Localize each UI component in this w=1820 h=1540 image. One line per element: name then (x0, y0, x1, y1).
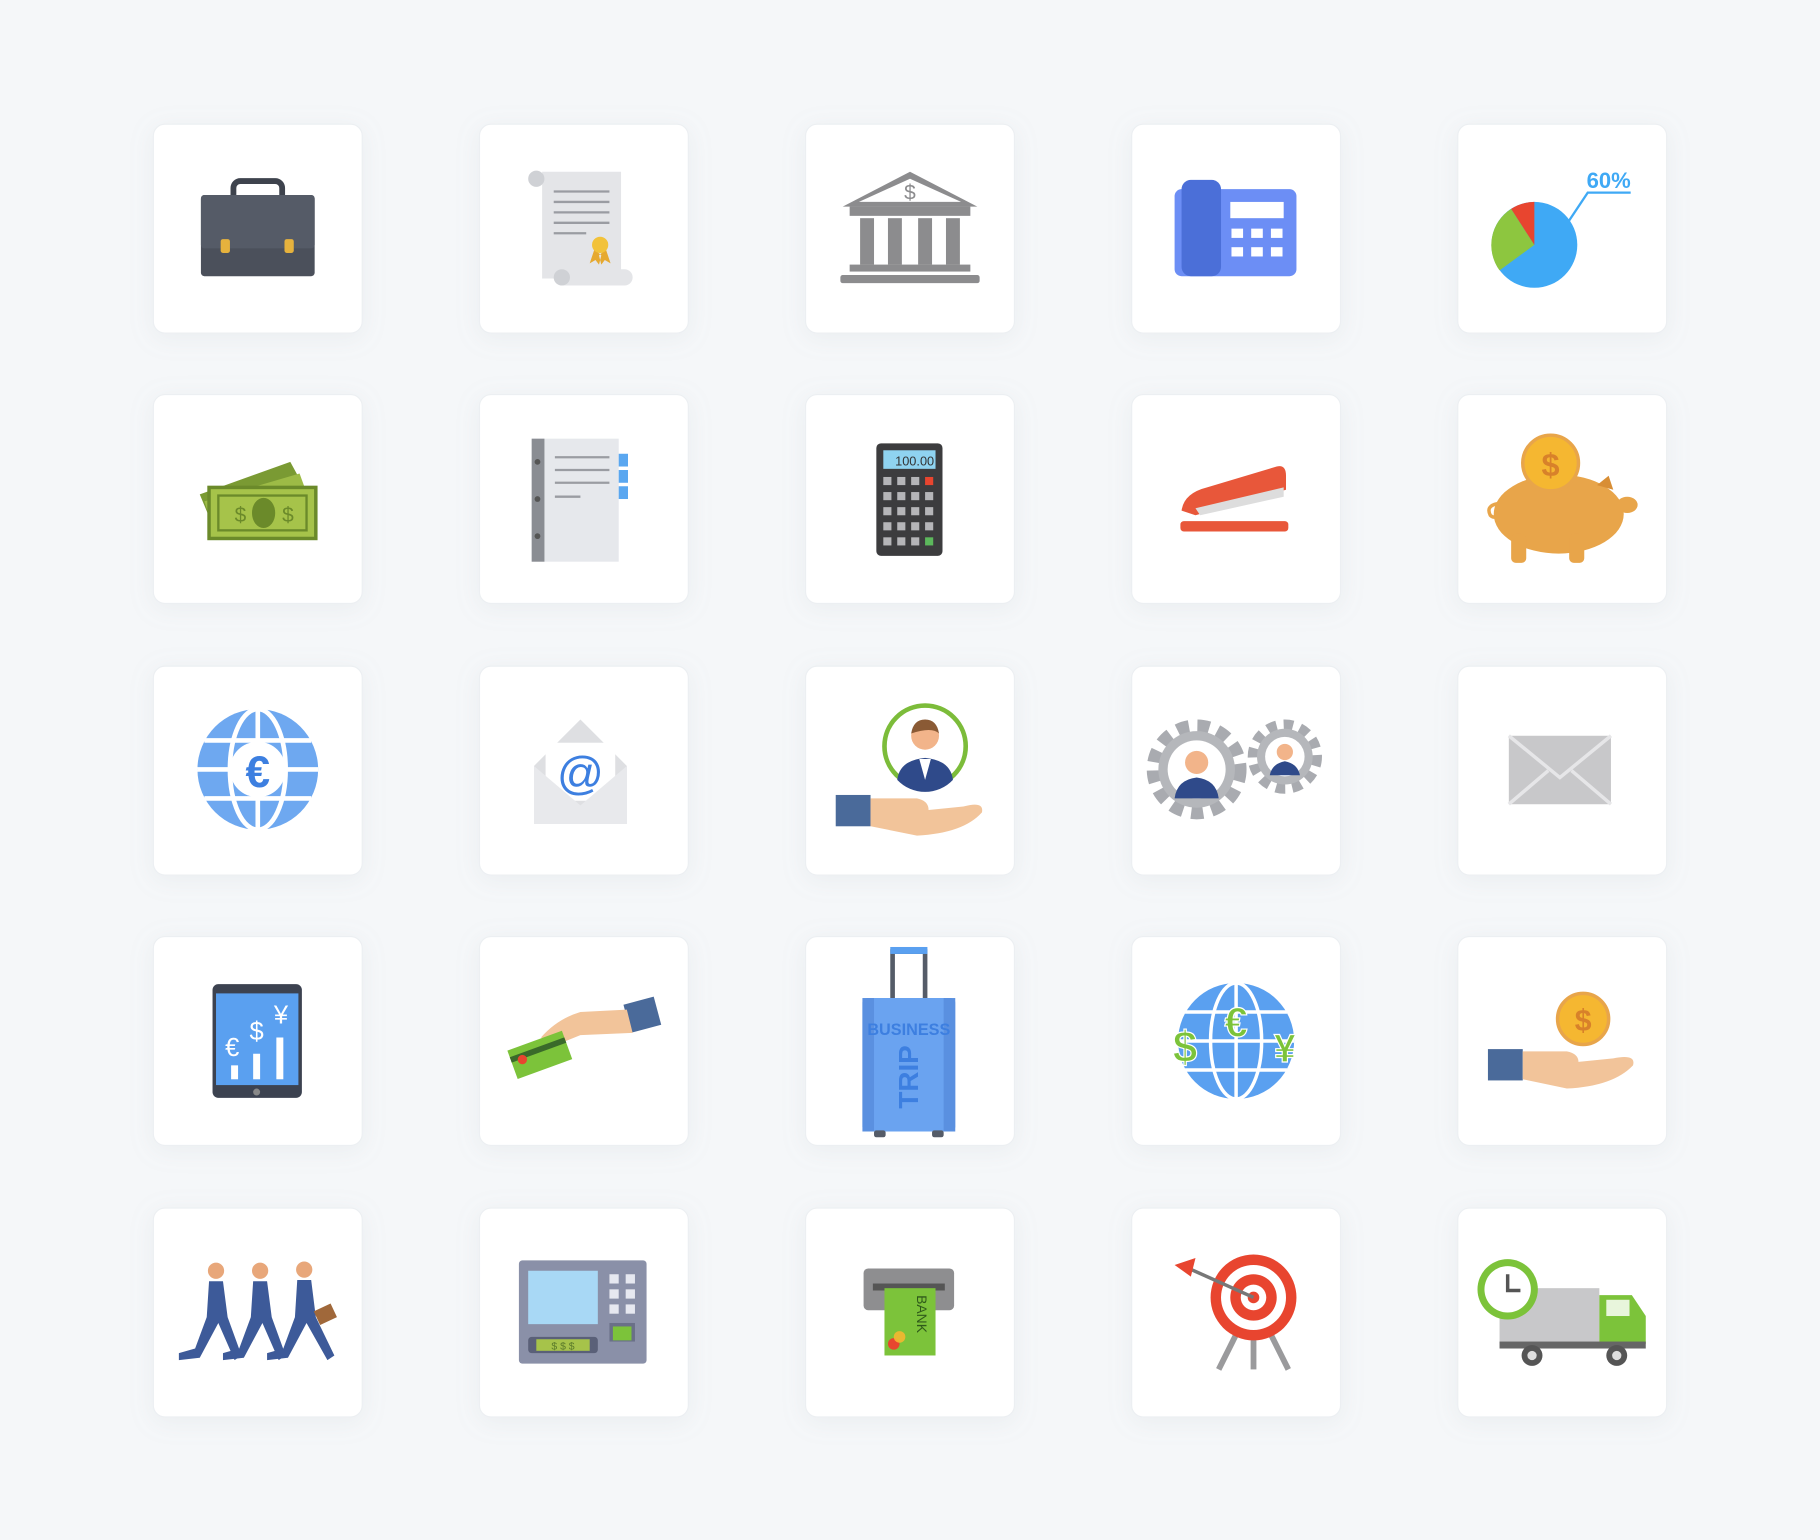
icon: money bills: $ (282, 504, 294, 527)
icon: pie chart 60% (1491, 168, 1631, 288)
icon: bank building: $ (904, 182, 916, 205)
icon: target with arrow (1175, 1255, 1296, 1369)
icon: business trip suitcase: TRIP (893, 1045, 924, 1109)
icon: walking businessmen (179, 1261, 337, 1360)
icon: hand holding person (836, 706, 982, 836)
icon: currency globe: $ (1173, 1023, 1197, 1072)
icon: business trip suitcase: BUSINESS (867, 1021, 951, 1039)
icon: currency globe: € (1224, 998, 1248, 1045)
icon: email envelope (534, 720, 627, 824)
icon: euro globe (197, 709, 318, 830)
icon: bank card slot: BANK (914, 1295, 930, 1334)
icon: money bills: $ (235, 504, 247, 527)
icon: gears with people (1155, 725, 1316, 811)
icon: hand with credit card (507, 997, 661, 1079)
icon: hand with coin (1488, 993, 1633, 1089)
icon: piggy bank (1489, 435, 1638, 563)
icon: calculator: 100.00 (895, 453, 934, 468)
icon: notebook (532, 439, 628, 562)
icon: bank building (840, 172, 980, 283)
icon: plain envelope (1509, 736, 1611, 804)
icon: pie chart 60%: 60% (1587, 168, 1631, 193)
icon: business trip suitcase (862, 947, 955, 1137)
icon: euro globe: € (246, 748, 270, 797)
icon: office phone (1175, 180, 1296, 276)
icon: money bills (200, 462, 316, 538)
icon: piggy bank: $ (1542, 447, 1560, 483)
icon: currency globe (1173, 983, 1296, 1099)
icon: briefcase (201, 181, 315, 276)
icon: delivery truck with clock (1477, 1259, 1646, 1366)
icon: hand with coin: $ (1575, 1005, 1592, 1038)
icon: ATM machine (519, 1260, 647, 1364)
icon: calculator (876, 443, 942, 556)
icon: ATM machine: $ $ $ (551, 1342, 575, 1353)
icon: email envelope: @ (557, 747, 604, 799)
card grid (153, 124, 1667, 1417)
icon: currency globe: ¥ (1274, 1027, 1296, 1071)
icon: stapler (1180, 466, 1288, 532)
icon: tablet with currency chart: $ (250, 1018, 264, 1046)
icon: bank card slot (864, 1268, 954, 1355)
icon: certificate scroll (528, 171, 633, 285)
icon: tablet with currency chart: ¥ (273, 1002, 289, 1030)
icon: tablet with currency chart: € (225, 1034, 239, 1062)
icon: tablet with currency chart (213, 984, 302, 1098)
